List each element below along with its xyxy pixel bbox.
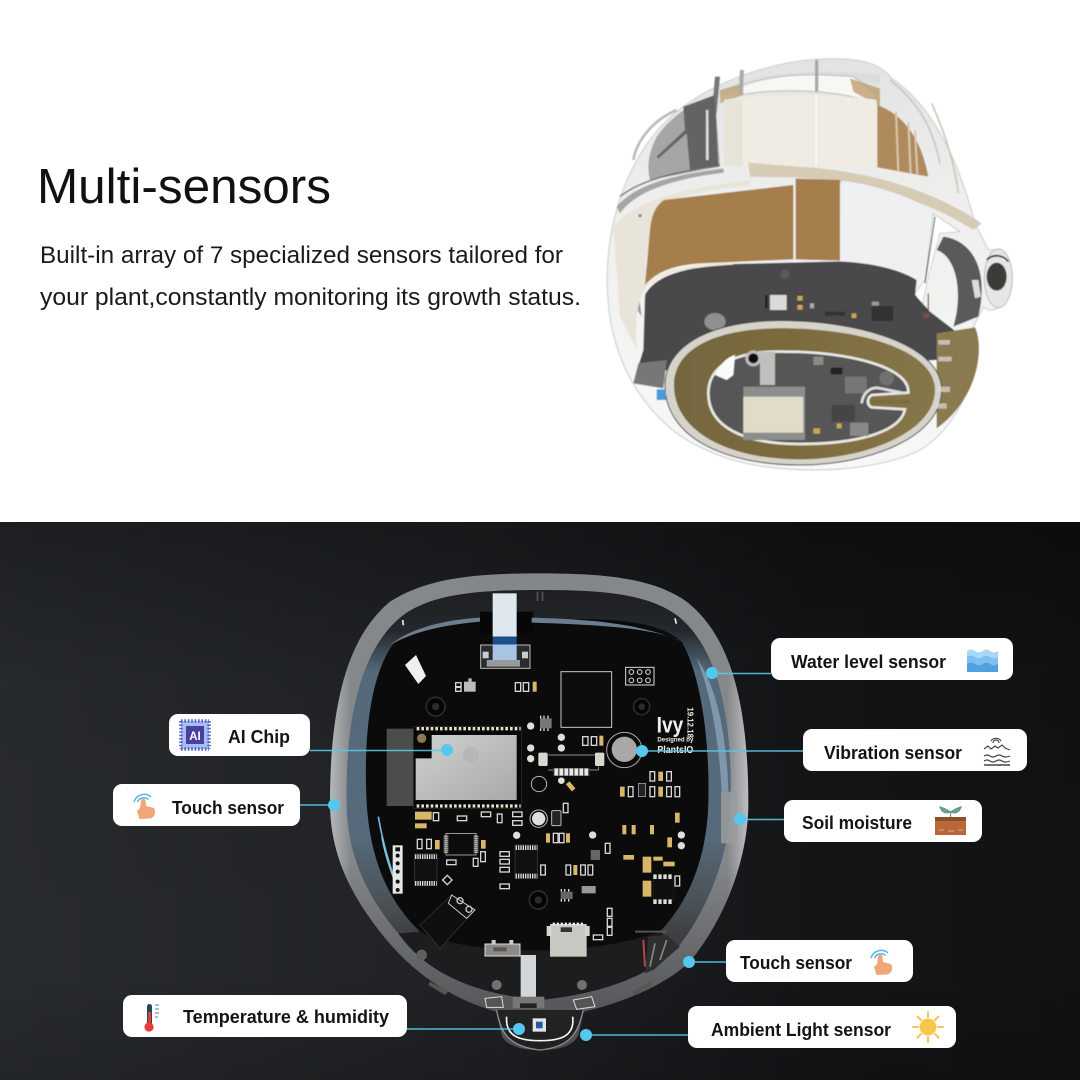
- icon: water waves: [967, 650, 998, 672]
- panel: white header: [0, 0, 1080, 522]
- icon: vibration waves: [984, 738, 1010, 765]
- callout: Vibration sensor: Vibration sensor: [824, 743, 962, 763]
- circuit window with pcb: [657, 350, 910, 444]
- callout: Touch sensor right: [726, 940, 913, 982]
- upper glass details: [712, 60, 958, 193]
- icon: thermometer: [144, 1004, 159, 1032]
- callout: Water level sensor: [771, 638, 1013, 680]
- icon: AI chip: AI: [189, 731, 201, 743]
- callout: Temperature and humidity: Temperature & humidity: [183, 1007, 389, 1027]
- icon: touch hand: [871, 950, 892, 975]
- callout: Ambient Light sensor: [688, 1006, 956, 1048]
- bottom ribbon cable: [513, 955, 544, 1008]
- angled bracket: [420, 895, 475, 948]
- pin header: [626, 667, 654, 685]
- beige band: [613, 163, 982, 350]
- bottom tab with sensors: [485, 997, 595, 1050]
- callout: Water level sensor: Water level sensor: [791, 652, 946, 672]
- white front panel: [842, 181, 933, 277]
- vibration motor: [607, 732, 642, 768]
- left internal dark parts: [617, 95, 724, 317]
- tan front panels: [645, 179, 840, 285]
- transparent outer shell: [607, 59, 1011, 470]
- icon: AI chip: [181, 721, 209, 749]
- outlined rings: [530, 776, 547, 827]
- right dark curved part: [915, 213, 982, 327]
- AI chip module: [387, 727, 522, 808]
- surface mount chips: [414, 678, 674, 902]
- text block: description: [40, 242, 581, 311]
- text block: description: your plant,constantly monitoring its growth status.: [40, 284, 581, 311]
- black cavity: [366, 592, 737, 957]
- right bump sensor: [984, 249, 1012, 308]
- product image: device top view with circuit board: [330, 573, 748, 1050]
- callout dots: [328, 667, 746, 1041]
- callout: Touch sensor left: [113, 784, 300, 826]
- panel: dark background: [0, 522, 1080, 1080]
- white round pads: [513, 722, 685, 849]
- side contact header: [393, 845, 403, 894]
- olive front ring: [674, 328, 935, 459]
- board marking text: PlantsIO: [657, 745, 694, 756]
- board marking text: [657, 707, 694, 756]
- callout: Touch sensor right: Touch sensor: [740, 953, 852, 973]
- front ring outer bezel: [665, 321, 942, 465]
- product image: device cutaway view: [607, 59, 1012, 470]
- slide switch: [485, 940, 520, 956]
- callout: Touch sensor left: Touch sensor: [172, 798, 284, 818]
- icon: sun: [913, 1012, 943, 1042]
- callout: AI Chip: [169, 714, 310, 756]
- board marking text: 19.12.18: [685, 707, 694, 739]
- transparent shell outer: [330, 573, 748, 1050]
- icon: soil and sprout: [935, 807, 966, 835]
- callout: Temperature and humidity: [123, 995, 407, 1037]
- right clear clips: [937, 340, 952, 409]
- board marking text: Ivy: [657, 713, 684, 738]
- icon: touch hand: [134, 794, 155, 819]
- bottom cavity housing: [398, 932, 680, 1000]
- board marking text: Designed by: [657, 736, 694, 743]
- shell inner blue band: [347, 590, 731, 1000]
- callout lines: [300, 674, 803, 1035]
- dark circuit body: [633, 261, 958, 388]
- callout: Soil moisture: [784, 800, 982, 842]
- top ribbon cable and connector: [481, 593, 530, 668]
- white battery box top: [724, 95, 877, 167]
- text block: description: Built-in array of 7 specialized sensors tailored for: [40, 242, 563, 269]
- title: Multi-sensors: [37, 160, 331, 214]
- gold and cream passives: [415, 682, 680, 897]
- callout: Ambient Light sensor: Ambient Light sensor: [711, 1020, 891, 1040]
- upper black chip: [561, 672, 612, 727]
- tan upper panel: [877, 105, 928, 177]
- small resistor pairs: [417, 683, 680, 940]
- mounting screw holes: [426, 697, 650, 909]
- callout: AI Chip: AI Chip: [228, 727, 290, 747]
- callout: Vibration sensor: [803, 729, 1027, 771]
- callout: Soil moisture: Soil moisture: [802, 813, 912, 833]
- small white diagonal ribbon: [405, 655, 426, 684]
- olive right flap: [937, 327, 979, 428]
- USB-C connector: [547, 924, 590, 957]
- side header pins: [395, 847, 400, 892]
